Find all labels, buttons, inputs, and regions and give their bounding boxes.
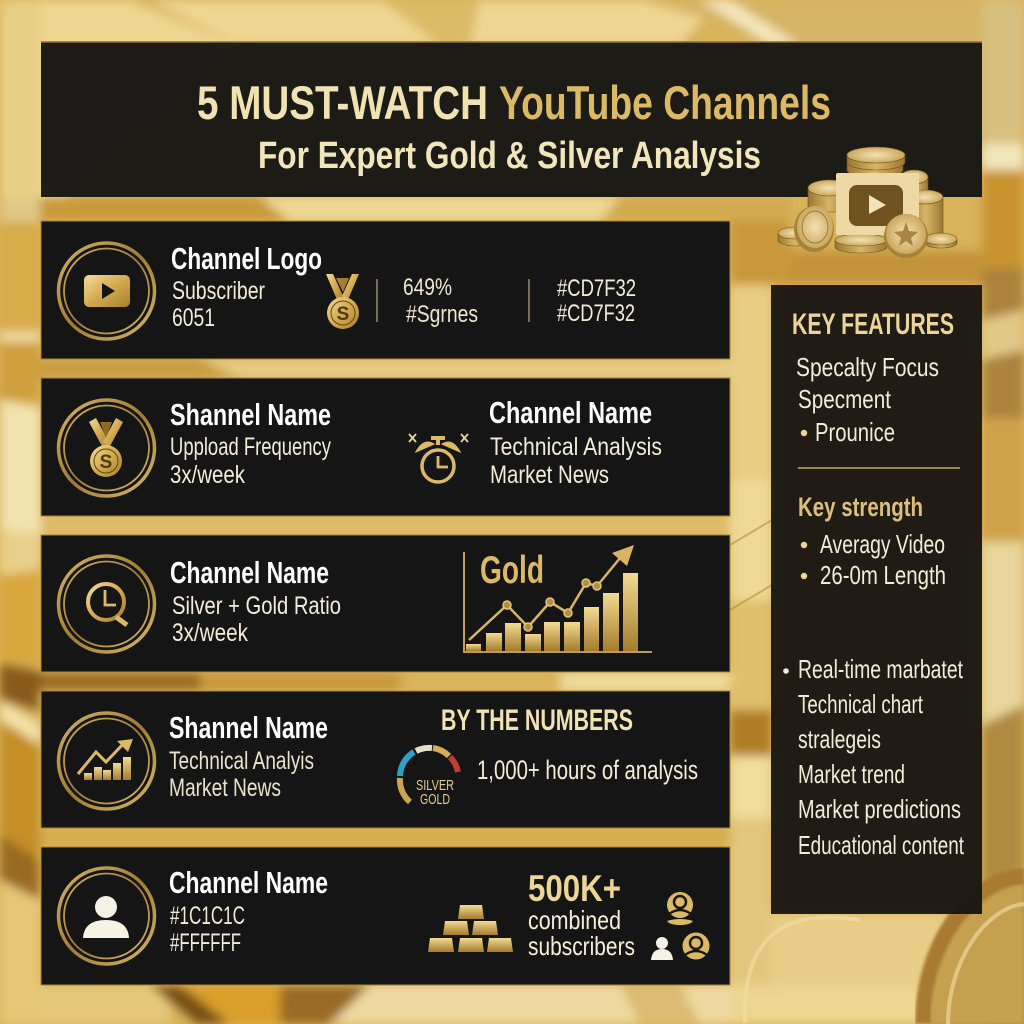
icon: audience people — [651, 892, 710, 960]
channel text: 3x/week — [170, 461, 245, 489]
icon: gold bar pyramid — [428, 905, 513, 952]
chart: gold price bars and trend line — [464, 545, 652, 652]
title line one: 5 MUST-WATCH — [197, 76, 488, 129]
title line two: For Expert Gold & Silver Analysis — [258, 135, 761, 177]
title line one: YouTube Channels — [499, 76, 831, 129]
panel: channel row 3 — [41, 535, 730, 672]
channel text: Shannel Name — [170, 397, 331, 432]
icon: medal: S — [337, 304, 349, 325]
channel text: Silver + Gold Ratio — [172, 592, 341, 620]
icon: magnifier clock badge — [58, 556, 154, 652]
specialty list: Specalty Focus — [796, 352, 939, 382]
channel text: #1C1C1C — [170, 902, 245, 930]
channel text — [169, 865, 328, 957]
colour code text: #CD7F32 — [557, 275, 636, 302]
panel: channel row 1 — [41, 221, 730, 359]
left margin — [0, 200, 40, 222]
colour code text — [557, 275, 636, 327]
subscriber stat: 500K+ — [528, 868, 621, 909]
secondary channel text — [489, 395, 662, 489]
icon: coin stack with play button — [778, 147, 957, 258]
specialty list — [796, 352, 939, 447]
content list: Market predictions — [798, 794, 961, 824]
subscriber stat — [528, 868, 635, 961]
title banner — [41, 42, 982, 197]
panel: channel row 5 — [41, 847, 730, 985]
content list: stralegeis — [798, 724, 881, 754]
panel: key features sidebar — [771, 285, 982, 914]
panel: channel row 4 — [41, 691, 730, 828]
channel text: 6051 — [172, 304, 215, 332]
column between panels and sidebar — [730, 221, 790, 285]
bottom strip — [40, 985, 170, 1024]
icon: medal badge: S — [100, 452, 112, 473]
channel text — [170, 397, 331, 489]
key features heading: KEY FEATURES — [792, 308, 954, 341]
specialty list: Prounice — [815, 417, 895, 447]
key strength list: 26-0m Length — [820, 560, 946, 590]
content list — [783, 654, 965, 860]
secondary channel text: Technical Analysis — [490, 433, 662, 461]
key strength heading: Key strength — [798, 492, 923, 522]
front coins — [794, 206, 834, 252]
secondary channel text: Channel Name — [489, 395, 652, 430]
icon: medal — [326, 274, 359, 329]
stat text: 649% — [403, 274, 452, 301]
gauge: silver gold: GOLD — [420, 791, 450, 808]
colour code text: #CD7F32 — [557, 300, 635, 327]
content list: Real-time marbatet — [798, 654, 964, 684]
back coin stacks — [778, 147, 957, 253]
channel text: Subscriber — [172, 277, 265, 305]
channel text — [169, 710, 328, 802]
channel text: 3x/week — [172, 619, 248, 647]
subscriber stat: subscribers — [528, 931, 635, 961]
channel text: Market News — [169, 774, 281, 802]
icon: person badge — [58, 868, 154, 964]
icon: youtube badge — [58, 243, 154, 339]
below sidebar — [771, 914, 982, 1024]
specialty list: Specment — [798, 384, 892, 414]
channel text: Channel Name — [169, 865, 328, 900]
channel text — [171, 241, 322, 332]
title line one — [197, 76, 831, 129]
icon: medal badge — [58, 400, 154, 496]
chart: gold price bars and trend line: Gold — [480, 549, 544, 592]
channel text: Technical Analyis — [169, 747, 314, 775]
stat text: #Sgrnes — [406, 301, 478, 328]
content list: Educational content — [798, 830, 965, 860]
right margin — [982, 0, 1024, 144]
gauge: silver gold: SILVER — [416, 777, 454, 794]
secondary channel text: Market News — [490, 461, 609, 489]
channel text: Channel Name — [170, 555, 329, 590]
icon: alarm clock — [409, 434, 468, 482]
stat text — [403, 274, 478, 328]
gauge: silver gold — [400, 748, 458, 808]
channel text: Uppload Frequency — [170, 433, 331, 461]
channel text: Channel Logo — [171, 241, 322, 276]
key strength list — [801, 529, 946, 590]
top strip — [150, 0, 720, 45]
play card — [836, 173, 919, 235]
channel text — [170, 555, 341, 647]
numbers stat: 1,000+ hours of analysis — [477, 755, 698, 785]
content list: Technical chart — [798, 689, 924, 719]
channel text: Shannel Name — [169, 710, 328, 745]
channel text: #FFFFFF — [170, 929, 241, 957]
panel: channel row 2 — [41, 378, 730, 516]
content list: Market trend — [798, 759, 905, 789]
icon: growth chart badge — [58, 713, 154, 809]
subscriber stat: combined — [528, 905, 621, 935]
numbers heading: BY THE NUMBERS — [441, 704, 633, 737]
big coin bottom right — [915, 868, 1024, 1024]
key strength list: Averagy Video — [820, 529, 945, 559]
gaps between panels — [40, 197, 300, 221]
